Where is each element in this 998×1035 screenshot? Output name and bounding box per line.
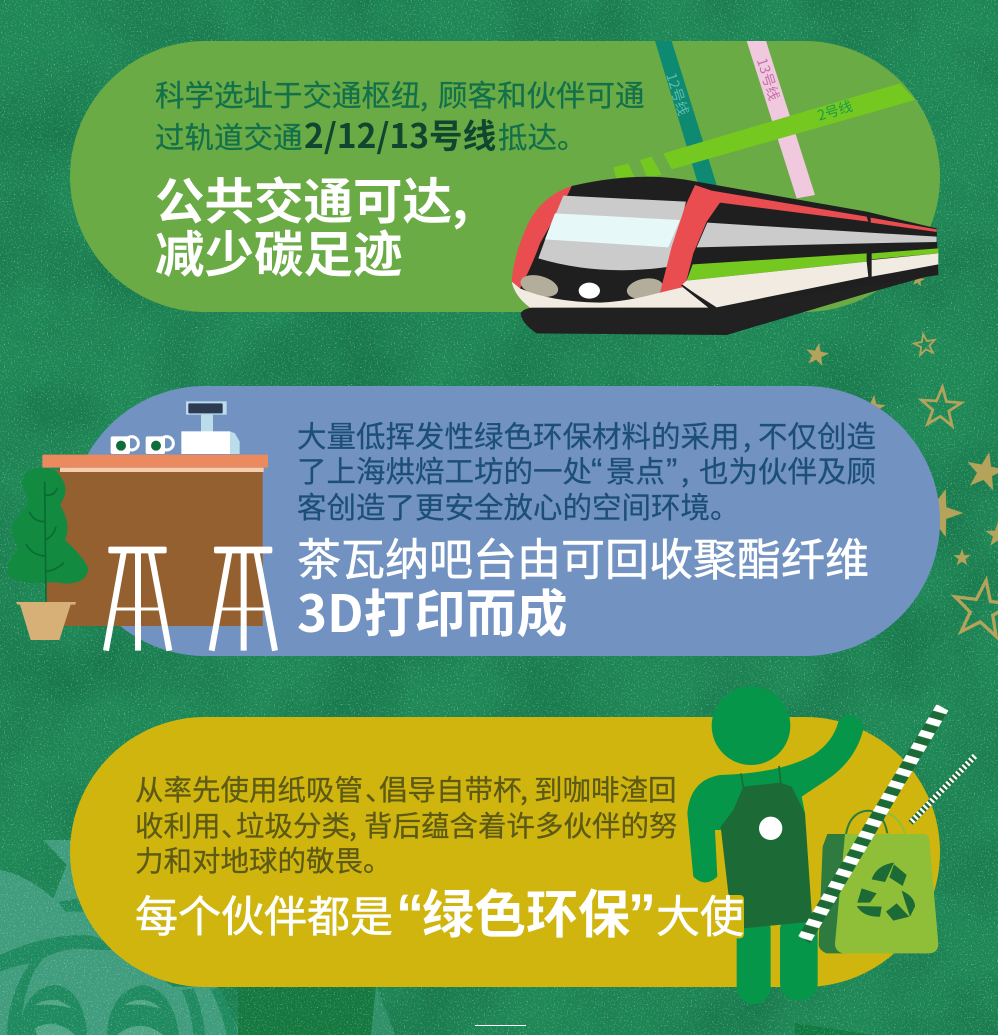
body text: 大量低挥发性绿色环保材料的采用 xyxy=(297,414,740,456)
body text: , xyxy=(420,73,428,115)
body text: 客创造了更安全放心的空间环境。 xyxy=(297,485,740,527)
icon: striped straw xyxy=(798,704,948,943)
light wedge: bottom centre xyxy=(371,985,395,1035)
body text: 到咖啡渣回 xyxy=(534,768,677,809)
dark patch: bottom centre xyxy=(238,985,376,1035)
body text: , xyxy=(743,414,751,456)
icon: recycling bag xyxy=(819,811,938,953)
body text: 倡导自带杯 xyxy=(379,768,522,809)
metro map lines: 12号线 xyxy=(661,70,694,118)
body text: 、 xyxy=(365,768,394,809)
metro map lines: 13号线 xyxy=(752,55,784,103)
body text: 收利用 xyxy=(135,804,221,845)
body text: 力和对地球的敬畏。 xyxy=(135,839,392,880)
heading: 公共交通可达, xyxy=(155,163,468,234)
body text: 垃圾分类 xyxy=(236,804,350,845)
body text xyxy=(297,414,876,527)
plant xyxy=(8,468,88,640)
panel: public transit xyxy=(70,41,940,335)
heading xyxy=(135,873,744,948)
body text: 科学选址于交通枢纽 xyxy=(155,73,421,115)
body text: 了上海烘焙工坊的一处 xyxy=(297,449,592,491)
heading: 大使 xyxy=(656,881,744,945)
heading: 茶瓦纳吧台由可回收聚酯纤维 xyxy=(297,524,869,588)
dark patch: bottom right xyxy=(795,1023,872,1035)
metro map lines xyxy=(613,41,915,198)
stools xyxy=(106,547,275,651)
body text: 、 xyxy=(221,804,250,845)
body text: 顾客和伙伴可通 xyxy=(438,73,645,115)
body text xyxy=(135,768,678,880)
decorative stars xyxy=(804,272,998,638)
body text: 抵达。 xyxy=(498,115,587,157)
panel: recycled material xyxy=(8,386,940,656)
text halo xyxy=(700,895,744,938)
heading: 3D打印而成 xyxy=(297,573,568,647)
panel background: green pill xyxy=(70,41,940,312)
panel: green ambassadors xyxy=(70,686,975,1004)
body text xyxy=(155,73,645,158)
body text: 景点 xyxy=(606,449,665,491)
illustration: partner, straws and bag xyxy=(687,686,975,1004)
footer rule xyxy=(475,1025,526,1026)
panel background: blue pill xyxy=(70,386,940,656)
body text: ” xyxy=(666,452,677,490)
heading: 减少碳足迹 xyxy=(155,216,402,287)
icon: cash register xyxy=(181,401,240,454)
body text: “ xyxy=(591,452,602,490)
icon: small straw xyxy=(911,756,975,823)
body text: 2/12/13号线 xyxy=(304,109,496,158)
illustration: train xyxy=(512,177,938,335)
body text: , xyxy=(681,449,689,491)
body text: 也为伙伴及顾 xyxy=(699,449,876,491)
illustration: bar counter with plant and stools xyxy=(8,401,275,651)
heading: ” xyxy=(628,882,656,945)
body text: , xyxy=(520,768,528,809)
heading xyxy=(297,524,869,647)
metro map lines: 2号线 xyxy=(815,96,855,125)
body text: 从率先使用纸吸管 xyxy=(135,768,363,809)
body text: , xyxy=(349,804,357,845)
figure xyxy=(687,686,864,1004)
heading: 绿色环保 xyxy=(422,873,630,948)
panel background: yellow pill xyxy=(70,717,940,987)
heading xyxy=(155,163,468,287)
body text: 背后蕴含着许多伙伴的努 xyxy=(364,804,678,845)
heading: “ xyxy=(396,882,424,945)
heading: 每个伙伴都是 xyxy=(135,883,393,945)
counter xyxy=(42,455,268,626)
body text: 不仅创造 xyxy=(758,414,876,456)
icon: coffee cups xyxy=(111,436,173,454)
body text: 过轨道交通 xyxy=(155,115,303,157)
watermark: siren logo xyxy=(0,840,242,1035)
